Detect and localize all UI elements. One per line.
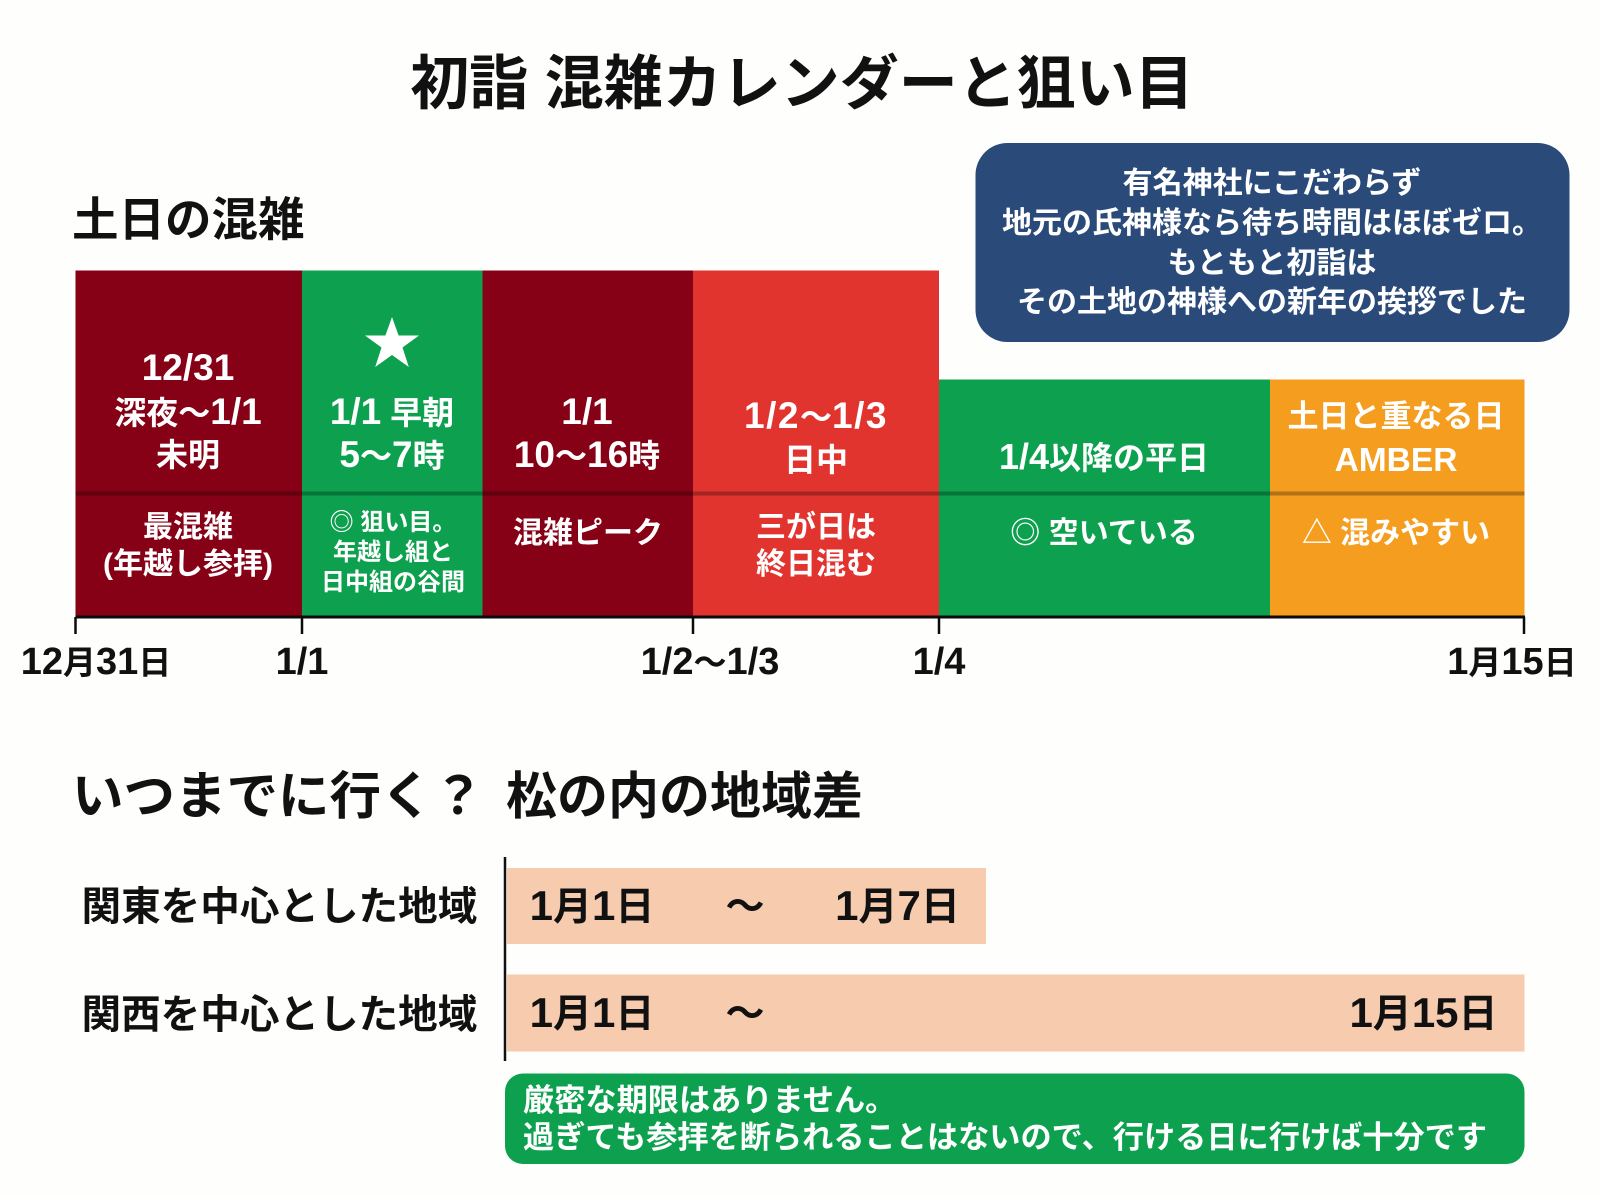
note: no strict deadline: 厳密な期限はありません。: [523, 1083, 896, 1118]
panel: weekdays after 1/4: ◎ 空いている: [1010, 517, 1198, 550]
panel: 1/1 early morning: ◎ 狙い目。: [330, 509, 456, 536]
row: Kanto: [82, 868, 986, 944]
heading: matsunouchi regional difference: 松の内の地域差: [506, 768, 863, 825]
timeline axis: 12月31日: [21, 641, 171, 683]
timeline axis: 1月15日: [1447, 641, 1577, 683]
row: Kansai: 関西を中心とした地域: [82, 993, 477, 1037]
panel: overlapping weekend days: 土日と重なる日: [1288, 399, 1504, 434]
panel: 12/31 late night: [76, 270, 302, 616]
callout: local shrine advice: その土地の神様への新年の挨拶でした: [1017, 286, 1527, 319]
callout: local shrine advice: 有名神社にこだわらず: [1123, 167, 1421, 200]
panel: 1/2 to 1/3: [693, 270, 939, 616]
panel: 12/31 late night: 未明: [156, 437, 220, 473]
row: Kansai: 〜: [725, 993, 765, 1036]
callout: local shrine advice: もともと初詣は: [1168, 247, 1376, 280]
panel: 12/31 late night: 深夜〜1/1: [114, 391, 262, 432]
panel: 1/2 to 1/3: 1/2〜1/3: [744, 395, 888, 436]
panel: 12/31 late night: (年越し参拝): [103, 548, 273, 581]
heading: when to visit: いつまでに行く？: [72, 767, 484, 825]
note: no strict deadline: [505, 1074, 1524, 1164]
panel: 1/1 daytime peak: 10〜16時: [514, 434, 660, 475]
timeline axis: 1/1: [276, 641, 328, 683]
panel: 1/2 to 1/3: 三が日は: [756, 510, 876, 544]
timeline axis: 1/4: [913, 641, 965, 683]
panel: 1/1 early morning: 1/1 早朝: [330, 391, 454, 432]
panel: 1/2 to 1/3: 日中: [784, 442, 848, 478]
row: Kansai: 1月15日: [1349, 989, 1498, 1036]
row: Kanto: 〜: [725, 886, 765, 929]
calendar band: [76, 270, 1524, 616]
panel: 1/1 early morning: [302, 270, 482, 616]
panel: 1/1 early morning: 年越し組と: [333, 539, 453, 566]
chart: matsunouchi regional ranges: [82, 857, 1524, 1061]
timeline axis: [21, 617, 1577, 683]
panel: overlapping weekend days: [1270, 380, 1524, 616]
panel: 1/1 daytime peak: [482, 270, 693, 616]
row: Kanto: 関東を中心とした地域: [82, 885, 477, 929]
note: no strict deadline: 過ぎても参拝を断られることはないので、行ける日に行けば十分です: [523, 1120, 1487, 1155]
icon: star: [365, 317, 419, 367]
panel: weekdays after 1/4: 1/4以降の平日: [999, 436, 1209, 477]
callout: local shrine advice: [976, 143, 1570, 342]
panel: 1/1 daytime peak: 混雑ピーク: [513, 517, 663, 550]
timeline axis: 1/2〜1/3: [641, 641, 779, 683]
row: Kansai: [82, 974, 1524, 1052]
title: 初詣 混雑カレンダーと狙い目: [410, 51, 1194, 117]
row: Kansai: 1月1日: [530, 989, 654, 1036]
panel: 12/31 late night: 12/31: [142, 347, 234, 388]
heading: weekend crowding: 土日の混雑: [72, 194, 304, 246]
panel: 1/1 early morning: 日中組の谷間: [321, 569, 465, 596]
row: Kanto: 1月1日: [530, 882, 654, 929]
panel: weekdays after 1/4: [939, 380, 1270, 616]
panel: overlapping weekend days: AMBER: [1335, 442, 1457, 479]
panel: 12/31 late night: 最混雑: [143, 511, 233, 544]
panel: 1/1 early morning: 5〜7時: [339, 434, 445, 475]
callout: local shrine advice: 地元の氏神様なら待ち時間はほぼゼロ。: [1002, 207, 1542, 240]
row: Kanto: 1月7日: [835, 882, 960, 929]
panel: 1/2 to 1/3: 終日混む: [756, 548, 876, 581]
panel: overlapping weekend days: △ 混みやすい: [1302, 517, 1490, 550]
panel: 1/1 daytime peak: 1/1: [561, 391, 613, 432]
